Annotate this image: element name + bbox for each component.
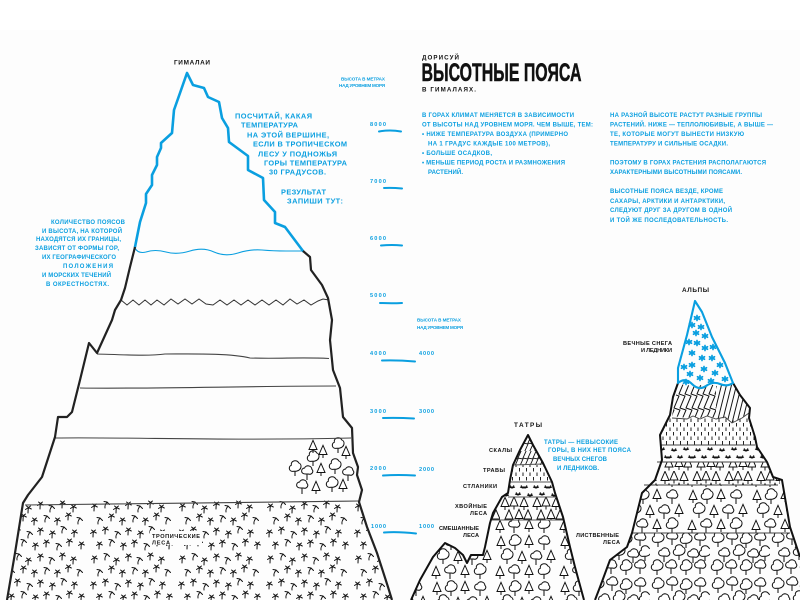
mountain: Tatras bbox=[410, 422, 585, 600]
callout: count the temperature: 30 ГРАДУСОВ. bbox=[269, 168, 326, 176]
grass band bbox=[662, 418, 754, 444]
text block: plant groups and belts: ТЕ, КОТОРЫЕ МОГУТ ВЫНЕСТИ НИЗКУЮ bbox=[610, 132, 744, 138]
rock band bbox=[515, 440, 542, 465]
callout: count the temperature: ТЕМПЕРАТУРА bbox=[241, 120, 299, 130]
altitude scale: main: 5000 bbox=[370, 293, 386, 299]
callout: count the temperature: НА ЭТОЙ ВЕРШИНЕ, bbox=[247, 130, 329, 140]
text block: climate and altitude: В ГОРАХ КЛИМАТ МЕНЯЕТСЯ В ЗАВИСИМОСТИ bbox=[422, 113, 574, 119]
callout: number of belts: И ВЫСОТА, НА КОТОРОЙ bbox=[42, 227, 122, 235]
text block: plant groups and belts: СЛЕДУЮТ ДРУГ ЗА ДРУГОМ В ОДНОЙ bbox=[610, 206, 732, 214]
altitude scale: main: 4000 bbox=[370, 351, 386, 357]
outline: left slope bbox=[7, 247, 135, 600]
callout: Tatras are low: ГОРЫ, В НИХ НЕТ ПОЯСА bbox=[548, 448, 632, 454]
belt labels: ЛЕСА bbox=[470, 511, 487, 517]
altitude scale: main: 2000 bbox=[370, 466, 386, 472]
callout: count the temperature: ЛЕСУ У ПОДНОЖЬЯ bbox=[258, 150, 337, 158]
text block: plant groups and belts: ВЫСОТНЫЕ ПОЯСА ВЕЗДЕ, КРОМЕ bbox=[610, 189, 723, 195]
callout: number of belts: ЗАВИСЯТ ОТ ФОРМЫ ГОР, bbox=[35, 246, 119, 252]
belt labels: СТЛАНИКИ bbox=[463, 484, 497, 490]
text block: plant groups and belts: ТЕМПЕРАТУРУ И СИЛЬНЫЕ ОСАДКИ. bbox=[610, 142, 728, 148]
outline: right slope bbox=[303, 251, 392, 600]
rock band: zigzags bbox=[672, 384, 716, 418]
subtitle: в гималаях: В ГИМАЛАЯХ. bbox=[422, 86, 476, 94]
kicker: дорисуй: ДОРИСУЙ bbox=[422, 54, 460, 62]
belt labels: ЛИСТВЕННЫЕ bbox=[576, 533, 619, 539]
callout: number of belts: КОЛИЧЕСТВО ПОЯСОВ bbox=[51, 220, 126, 226]
belt labels: ЛЕСА bbox=[603, 540, 620, 546]
conifer band bbox=[655, 462, 780, 484]
mountain: Alps bbox=[576, 287, 800, 600]
band boundaries bbox=[25, 354, 359, 505]
altitude scale: main: 3000 bbox=[370, 409, 386, 415]
callout: number of belts: НАХОДЯТСЯ ИХ ГРАНИЦЫ, bbox=[36, 237, 121, 243]
altitude scale: second: ВЫСОТА В МЕТРАХ bbox=[417, 318, 462, 322]
belt labels: ТРАВЫ bbox=[483, 468, 506, 474]
conifer band bbox=[490, 497, 565, 520]
snow line wave bbox=[135, 248, 303, 255]
snow stars bbox=[682, 316, 728, 384]
belt labels: ХВОЙНЫЕ bbox=[455, 502, 487, 510]
belt labels bbox=[576, 341, 672, 546]
callout: count the temperature: ПОСЧИТАЙ, КАКАЯ bbox=[235, 112, 312, 120]
altitude scale: second bbox=[417, 318, 463, 530]
text block: climate and altitude bbox=[422, 113, 593, 176]
altitude scale: second: НАД УРОВНЕМ МОРЯ bbox=[417, 325, 463, 330]
callout: number of belts: И МОРСКИХ ТЕЧЕНИЙ bbox=[42, 271, 111, 279]
callout: number of belts bbox=[35, 220, 126, 288]
altitude scale: second: 3000 bbox=[419, 409, 434, 415]
label: tropical forest: ЛЕСА bbox=[152, 540, 170, 546]
outline bbox=[411, 435, 584, 600]
callout: number of belts: ПОЛОЖЕНИЯ bbox=[63, 264, 113, 270]
zigzag boundary bbox=[121, 299, 329, 305]
label: Tatras: ТАТРЫ bbox=[514, 422, 542, 429]
callout: count the temperature bbox=[235, 112, 348, 206]
deciduous forest band bbox=[595, 533, 800, 600]
mixed forest band bbox=[636, 486, 790, 532]
belt labels: ЛЕСА bbox=[463, 533, 479, 539]
text block: plant groups and belts: ПОЭТОМУ В ГОРАХ РАСТЕНИЯ РАСПОЛАГАЮТСЯ bbox=[610, 161, 766, 167]
band boundaries bbox=[491, 464, 564, 520]
text block: climate and altitude: • БОЛЬШЕ ОСАДКОВ, bbox=[422, 151, 492, 157]
text block: plant groups and belts: ХАРАКТЕРНЫМИ ВЫСОТНЫМИ ПОЯСАМИ. bbox=[610, 170, 742, 176]
altitude scale: main: НАД УРОВНЕМ МОРЯ bbox=[339, 83, 385, 88]
altitude scale: second: 1000 bbox=[419, 524, 434, 530]
main heading: ВЫСОТНЫЕ ПОЯСА bbox=[422, 59, 582, 87]
callout: Tatras are low: ТАТРЫ — НЕВЫСОКИЕ bbox=[544, 440, 618, 446]
text block: plant groups and belts: РАСТЕНИЙ. НИЖЕ — ТЕПЛОЛЮБИВЫЕ, А ВЫШЕ — bbox=[610, 121, 773, 129]
belt labels: СМЕШАННЫЕ bbox=[439, 526, 479, 532]
callout: count the temperature: ГОРЫ ТЕМПЕРАТУРА bbox=[264, 158, 348, 168]
mixed forest band bbox=[410, 520, 585, 600]
band boundaries bbox=[632, 413, 790, 533]
text block: plant groups and belts: И ТОЙ ЖЕ ПОСЛЕДОВАТЕЛЬНОСТЬ. bbox=[610, 216, 728, 224]
outline: snow cap bbox=[678, 301, 733, 388]
text block: climate and altitude: ОТ ВЫСОТЫ НАД УРОВНЕМ МОРЯ. ЧЕМ ВЫШЕ, ТЕМ: bbox=[422, 123, 593, 129]
label: tropical forest: ТРОПИЧЕСКИЕ bbox=[152, 534, 200, 540]
label: Himalaya: ГИМАЛАИ bbox=[174, 60, 210, 66]
callout: count the temperature: ЕСЛИ В ТРОПИЧЕСКОМ bbox=[253, 140, 347, 148]
title block bbox=[422, 54, 582, 94]
text block: plant groups and belts: НА РАЗНОЙ ВЫСОТЕ РАСТУТ РАЗНЫЕ ГРУППЫ bbox=[610, 111, 762, 119]
belt labels bbox=[439, 448, 513, 539]
outline: snow zone bbox=[135, 73, 303, 251]
callout: number of belts: В ОКРЕСТНОСТЯХ. bbox=[46, 282, 109, 288]
belt labels: ВЕЧНЫЕ СНЕГА bbox=[623, 341, 672, 347]
grass band bbox=[512, 465, 548, 480]
tropical forest fill bbox=[0, 498, 400, 600]
callout: count the temperature: РЕЗУЛЬТАТ bbox=[281, 188, 326, 196]
altitude scale: main: 1000 bbox=[371, 524, 386, 530]
text block: plant groups and belts: САХАРЫ, АРКТИКИ И АНТАРКТИКИ, bbox=[610, 199, 725, 205]
altitude scale: second: 4000 bbox=[419, 351, 434, 357]
sample tree cluster bbox=[289, 438, 354, 494]
text block: plant groups and belts bbox=[610, 111, 773, 224]
belt labels: СКАЛЫ bbox=[489, 448, 513, 454]
label: tropical forest bbox=[150, 531, 202, 546]
text block: climate and altitude: • МЕНЬШЕ ПЕРИОД РОСТА И РАЗМНОЖЕНИЯ bbox=[422, 161, 565, 167]
outline: rock and forest bbox=[595, 383, 678, 600]
altitude scale: main: 6000 bbox=[370, 236, 386, 242]
callout: Tatras are low bbox=[544, 440, 632, 472]
text block: climate and altitude: НА 1 ГРАДУС КАЖДЫЕ 100 МЕТРОВ), bbox=[428, 142, 550, 148]
altitude scale: main: 7000 bbox=[370, 179, 386, 185]
text block: climate and altitude: РАСТЕНИЙ. bbox=[428, 168, 463, 176]
label: Alps: АЛЬПЫ bbox=[682, 287, 709, 294]
mountain: Himalaya bbox=[0, 60, 400, 600]
belt labels: И ЛЕДНИКИ bbox=[641, 348, 672, 354]
altitude scale: main bbox=[339, 76, 416, 534]
callout: number of belts: ИХ ГЕОГРАФИЧЕСКОГО bbox=[42, 255, 116, 261]
callout: Tatras are low: И ЛЕДНИКОВ. bbox=[557, 466, 599, 472]
callout: Tatras are low: ВЕЧНЫХ СНЕГОВ bbox=[553, 457, 608, 463]
altitude scale: second: 2000 bbox=[419, 467, 434, 473]
altitude scale: main: 8000 bbox=[370, 122, 386, 128]
rock band: diagonals bbox=[716, 384, 747, 422]
altitude scale: main: ВЫСОТА В МЕТРАХ bbox=[341, 76, 386, 82]
krummholz band bbox=[662, 447, 764, 459]
callout: count the temperature: ЗАПИШИ ТУТ: bbox=[287, 196, 343, 206]
text block: climate and altitude: • НИЖЕ ТЕМПЕРАТУРА ВОЗДУХА (ПРИМЕРНО bbox=[422, 132, 568, 138]
krummholz band bbox=[504, 485, 555, 497]
